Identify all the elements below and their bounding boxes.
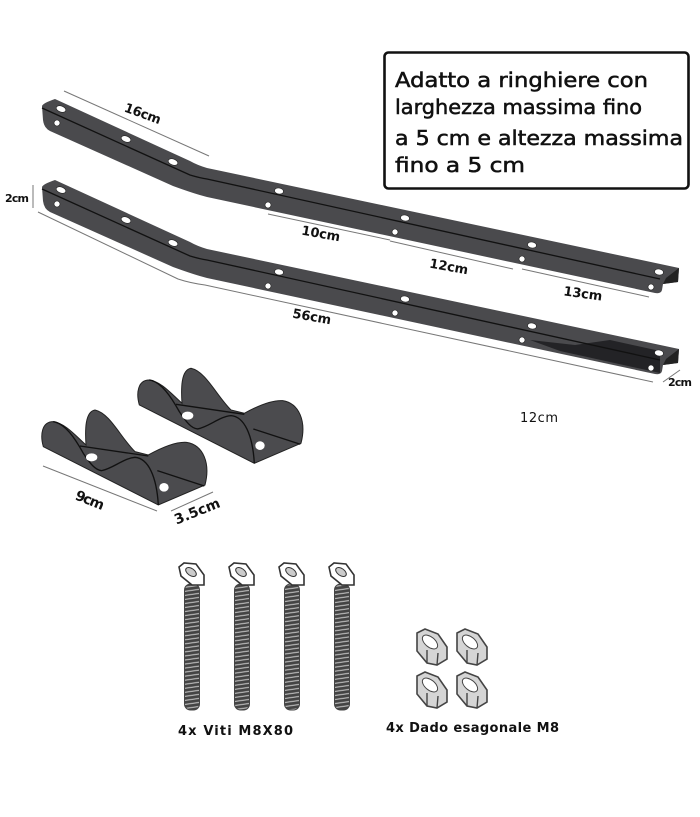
nut 3 <box>417 672 447 708</box>
screw 1 <box>179 563 204 710</box>
dimension labels <box>5 101 692 528</box>
rail: upper bar <box>42 99 679 293</box>
dimension labels: 2cm <box>5 192 29 205</box>
nut 2 <box>457 629 487 665</box>
nut 4 <box>457 672 487 708</box>
dimension lines <box>33 91 680 511</box>
nuts caption: 4x Dado esagonale M8 <box>386 721 559 736</box>
nut 1 <box>417 629 447 665</box>
dimension labels: 16cm <box>122 101 163 128</box>
screw 3 <box>279 563 304 710</box>
dimension labels: 12cm <box>428 257 469 278</box>
dimension labels: 10cm <box>300 224 341 245</box>
info box <box>384 52 688 188</box>
dimension labels: 56cm <box>291 307 332 328</box>
info box: larghezza massima fino <box>395 95 642 119</box>
screws caption: 4x Viti M8X80 <box>178 724 293 739</box>
screw 2 <box>229 563 254 710</box>
dimension labels: 12cm <box>520 411 558 426</box>
dimension labels: 9cm <box>73 488 107 514</box>
dimension labels: 3.5cm <box>172 496 223 528</box>
bracket: rear <box>138 368 303 463</box>
bracket: front <box>42 410 207 505</box>
info box: Adatto a ringhiere con <box>395 68 648 92</box>
info box: a 5 cm e altezza massima <box>395 126 683 150</box>
dimension labels: 2cm <box>668 376 692 389</box>
dimension labels: 13cm <box>562 284 603 305</box>
info box: fino a 5 cm <box>395 153 525 177</box>
rail: lower bar <box>42 180 679 374</box>
screw 4 <box>329 563 354 710</box>
